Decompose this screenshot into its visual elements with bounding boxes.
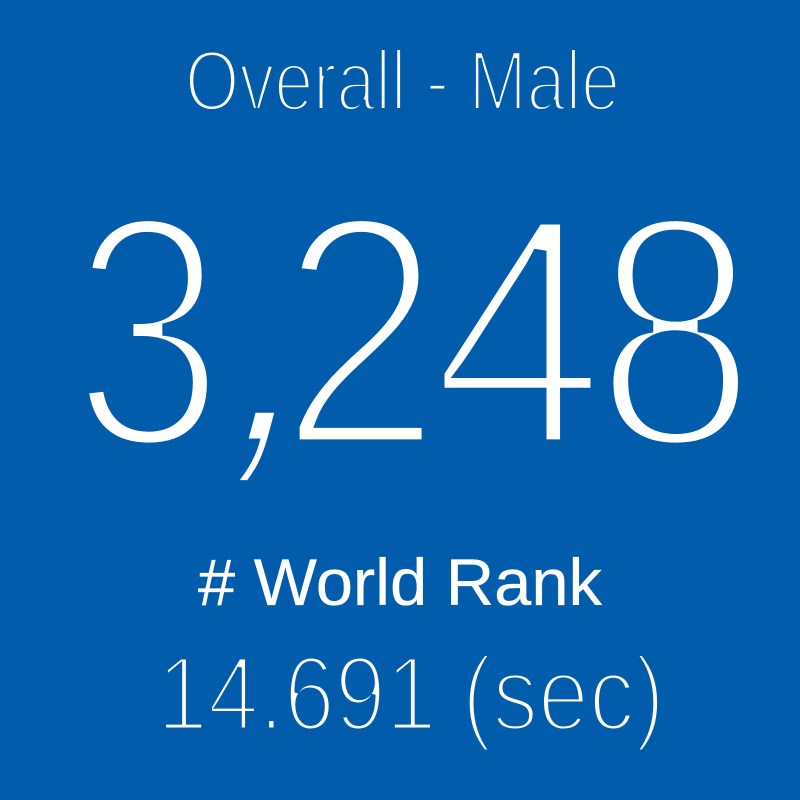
big number: world rank: 2 <box>279 147 442 517</box>
big number: world rank <box>72 146 756 517</box>
big number: world rank: 3 <box>72 147 224 517</box>
title: Overall - Male <box>185 34 620 129</box>
big number: world rank: 8 <box>595 147 756 517</box>
big number: world rank: 4 <box>431 146 606 517</box>
time value: 14.691 (sec) <box>157 635 665 753</box>
big number: world rank: , <box>199 149 373 513</box>
label: world rank: # World Rank <box>198 545 603 619</box>
